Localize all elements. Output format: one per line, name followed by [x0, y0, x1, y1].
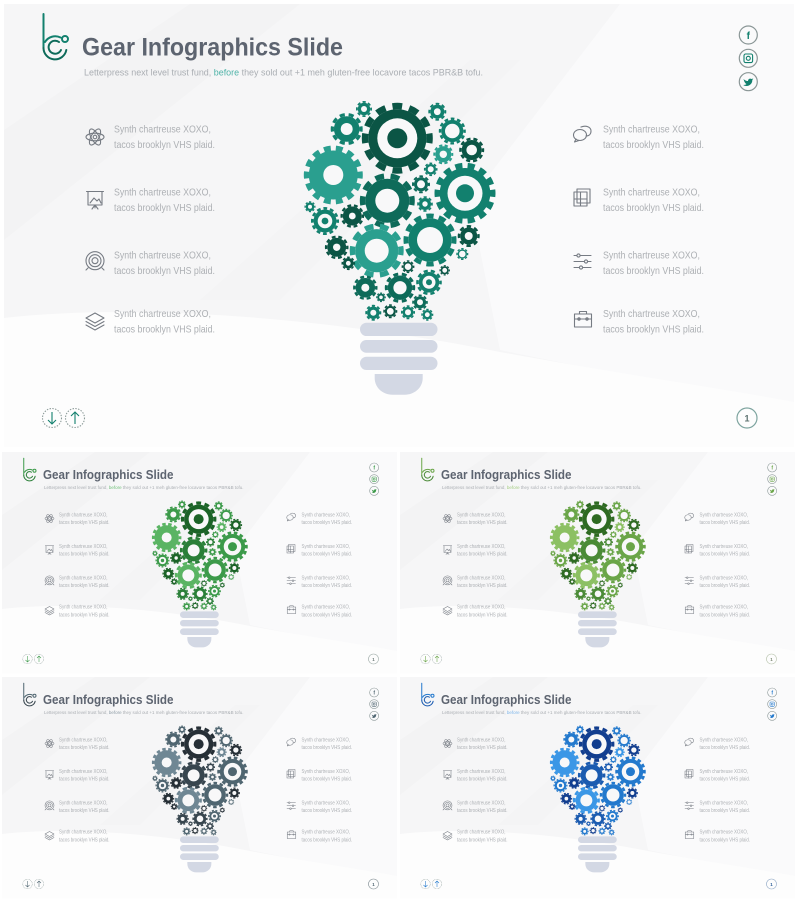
- logo: [44, 14, 68, 59]
- right items: Synth chartreuse XOXO,: [302, 769, 350, 775]
- lime gear bulb: [551, 501, 644, 647]
- navigation and page number: [421, 879, 776, 889]
- right items: Synth chartreuse XOXO,: [700, 604, 748, 610]
- right items: Synth chartreuse XOXO,: [700, 544, 748, 550]
- panel: blue slide: [400, 677, 795, 898]
- left items: tacos brooklyn VHS plaid.: [59, 808, 110, 814]
- right items: [685, 737, 750, 843]
- gears forming the bulb: [305, 102, 493, 320]
- left items: Synth chartreuse XOXO,: [457, 830, 506, 836]
- header: Gear Infographics Slide: [43, 468, 174, 482]
- text: left item 2: tacos brooklyn VHS plaid.: [114, 202, 215, 214]
- left items: tacos brooklyn VHS plaid.: [457, 612, 508, 618]
- right items: tacos brooklyn VHS plaid.: [302, 808, 352, 814]
- header: Letterpress next level trust fund, before they sold out +1 meh gluten-free locavore tacos PBR&B tofu.: [44, 710, 244, 716]
- left items: Synth chartreuse XOXO,: [457, 604, 506, 610]
- right items: Synth chartreuse XOXO,: [302, 737, 350, 743]
- social icons: [739, 26, 757, 91]
- right items: Synth chartreuse XOXO,: [302, 800, 350, 806]
- text: right item 1: tacos brooklyn VHS plaid.: [603, 139, 704, 151]
- right items: Synth chartreuse XOXO,: [700, 737, 748, 743]
- panel: grey slide: [2, 677, 397, 898]
- bulb base: [360, 323, 438, 395]
- header: Gear Infographics Slide: [441, 468, 572, 482]
- header: Letterpress next level trust fund, before they sold out +1 meh gluten-free locavore tacos PBR&B tofu.: [44, 485, 244, 491]
- left items: tacos brooklyn VHS plaid.: [59, 776, 110, 782]
- title: Gear Infographics Slide: [82, 34, 343, 62]
- right items: tacos brooklyn VHS plaid.: [302, 520, 352, 526]
- right items: tacos brooklyn VHS plaid.: [302, 552, 352, 558]
- right items: Synth chartreuse XOXO,: [302, 830, 350, 836]
- left items: [45, 512, 110, 618]
- right items: tacos brooklyn VHS plaid.: [700, 583, 750, 589]
- right items: tacos brooklyn VHS plaid.: [302, 776, 352, 782]
- header: [24, 458, 244, 491]
- left items: Synth chartreuse XOXO,: [457, 575, 506, 581]
- left items: Synth chartreuse XOXO,: [457, 737, 506, 743]
- left items: Synth chartreuse XOXO,: [59, 575, 108, 581]
- right items: tacos brooklyn VHS plaid.: [302, 745, 352, 751]
- left items: Synth chartreuse XOXO,: [59, 737, 108, 743]
- blue gear bulb: [551, 726, 644, 872]
- grey gear bulb: [153, 726, 246, 872]
- text: left item 3: Synth chartreuse XOXO,: [114, 250, 211, 262]
- social icons: [768, 688, 777, 720]
- right items: [685, 512, 750, 618]
- social icons: [370, 688, 379, 720]
- page number: [737, 408, 757, 428]
- icon: frames: [574, 189, 590, 206]
- left items: tacos brooklyn VHS plaid.: [59, 520, 110, 526]
- panel: main teal slide: [4, 4, 794, 447]
- left items: Synth chartreuse XOXO,: [457, 800, 506, 806]
- text: left item 1: Synth chartreuse XOXO,: [114, 124, 211, 136]
- header: Gear Infographics Slide: [441, 693, 572, 707]
- left items: tacos brooklyn VHS plaid.: [59, 745, 110, 751]
- right items: tacos brooklyn VHS plaid.: [700, 808, 750, 814]
- social icons: f: [373, 690, 375, 696]
- right items: Synth chartreuse XOXO,: [700, 769, 748, 775]
- left items: [443, 512, 508, 618]
- social icons: f: [373, 466, 375, 472]
- left items: Synth chartreuse XOXO,: [457, 769, 506, 775]
- right items: tacos brooklyn VHS plaid.: [302, 612, 352, 618]
- text: right item 3: Synth chartreuse XOXO,: [603, 250, 700, 262]
- left items: Synth chartreuse XOXO,: [457, 544, 506, 550]
- text: left item 1: tacos brooklyn VHS plaid.: [114, 139, 215, 151]
- text: right item 4: tacos brooklyn VHS plaid.: [603, 324, 704, 336]
- panel: green slide: [2, 452, 397, 674]
- navigation and page number: [421, 654, 776, 664]
- left items: Synth chartreuse XOXO,: [59, 830, 108, 836]
- left items: tacos brooklyn VHS plaid.: [457, 837, 508, 843]
- left items: tacos brooklyn VHS plaid.: [59, 612, 110, 618]
- text: left item 3: tacos brooklyn VHS plaid.: [114, 265, 215, 277]
- right items: tacos brooklyn VHS plaid.: [302, 583, 352, 589]
- left items: tacos brooklyn VHS plaid.: [457, 552, 508, 558]
- text: left item 4: tacos brooklyn VHS plaid.: [114, 324, 215, 336]
- text: right item 2: tacos brooklyn VHS plaid.: [603, 202, 704, 214]
- subtitle: Letterpress next level trust fund, before they sold out +1 meh gluten-free locavore tacos PBR&B tofu.: [84, 68, 483, 78]
- right items: Synth chartreuse XOXO,: [302, 604, 350, 610]
- left items: tacos brooklyn VHS plaid.: [59, 552, 110, 558]
- right items: Synth chartreuse XOXO,: [302, 575, 350, 581]
- header: Letterpress next level trust fund, before they sold out +1 meh gluten-free locavore tacos PBR&B tofu.: [442, 710, 642, 716]
- right items: Synth chartreuse XOXO,: [700, 800, 748, 806]
- right items: Synth chartreuse XOXO,: [700, 830, 748, 836]
- icon: briefcase: [574, 312, 592, 327]
- left items: Synth chartreuse XOXO,: [59, 604, 108, 610]
- right items: tacos brooklyn VHS plaid.: [700, 520, 750, 526]
- right items: Synth chartreuse XOXO,: [302, 512, 350, 518]
- right items: Synth chartreuse XOXO,: [700, 575, 748, 581]
- text: left item 4: Synth chartreuse XOXO,: [114, 308, 211, 320]
- text: right item 4: Synth chartreuse XOXO,: [603, 308, 700, 320]
- header: [422, 683, 642, 716]
- left items: [45, 737, 110, 843]
- header: [24, 683, 244, 716]
- social icons: f: [747, 31, 751, 42]
- left items: tacos brooklyn VHS plaid.: [457, 583, 508, 589]
- right items: [287, 512, 352, 618]
- navigation arrows: [42, 408, 84, 428]
- left items: Synth chartreuse XOXO,: [59, 512, 108, 518]
- navigation and page number: [23, 654, 378, 664]
- left items: tacos brooklyn VHS plaid.: [457, 745, 508, 751]
- text: right item 1: Synth chartreuse XOXO,: [603, 124, 700, 136]
- navigation and page number: 1: [770, 882, 773, 887]
- left items: tacos brooklyn VHS plaid.: [59, 837, 110, 843]
- left items: Synth chartreuse XOXO,: [59, 544, 108, 550]
- right items: tacos brooklyn VHS plaid.: [700, 776, 750, 782]
- page number: 1: [744, 414, 750, 424]
- navigation and page number: 1: [372, 882, 375, 887]
- navigation and page number: 1: [770, 657, 773, 662]
- icon: presentation board: [86, 192, 104, 209]
- header: Gear Infographics Slide: [43, 693, 174, 707]
- text: left item 2: Synth chartreuse XOXO,: [114, 186, 211, 198]
- green gear bulb: [153, 501, 246, 647]
- social icons: f: [771, 690, 773, 696]
- text: right item 3: tacos brooklyn VHS plaid.: [603, 265, 704, 277]
- right items: Synth chartreuse XOXO,: [700, 512, 748, 518]
- header: [422, 458, 642, 491]
- right items: tacos brooklyn VHS plaid.: [700, 612, 750, 618]
- left items: [443, 737, 508, 843]
- left items: tacos brooklyn VHS plaid.: [457, 520, 508, 526]
- text: right item 2: Synth chartreuse XOXO,: [603, 186, 700, 198]
- left items: tacos brooklyn VHS plaid.: [457, 808, 508, 814]
- navigation and page number: 1: [372, 657, 375, 662]
- right items: tacos brooklyn VHS plaid.: [700, 745, 750, 751]
- panel: lime slide: [400, 452, 795, 674]
- icon: target: [86, 252, 104, 270]
- right items: tacos brooklyn VHS plaid.: [302, 837, 352, 843]
- right items: tacos brooklyn VHS plaid.: [700, 837, 750, 843]
- social icons: f: [771, 466, 773, 472]
- right items: Synth chartreuse XOXO,: [302, 544, 350, 550]
- icon: atom: [86, 127, 104, 147]
- left items: tacos brooklyn VHS plaid.: [457, 776, 508, 782]
- left items: Synth chartreuse XOXO,: [59, 769, 108, 775]
- left items: Synth chartreuse XOXO,: [457, 512, 506, 518]
- left items: Synth chartreuse XOXO,: [59, 800, 108, 806]
- navigation and page number: [23, 879, 378, 889]
- header: Letterpress next level trust fund, before they sold out +1 meh gluten-free locavore tacos PBR&B tofu.: [442, 485, 642, 491]
- right items: [287, 737, 352, 843]
- social icons: [768, 463, 777, 495]
- icon: sliders: [574, 254, 591, 269]
- right items: tacos brooklyn VHS plaid.: [700, 552, 750, 558]
- left items: tacos brooklyn VHS plaid.: [59, 583, 110, 589]
- social icons: [370, 463, 379, 495]
- icon: chat bubbles: [574, 126, 591, 142]
- icon: layers: [86, 313, 104, 330]
